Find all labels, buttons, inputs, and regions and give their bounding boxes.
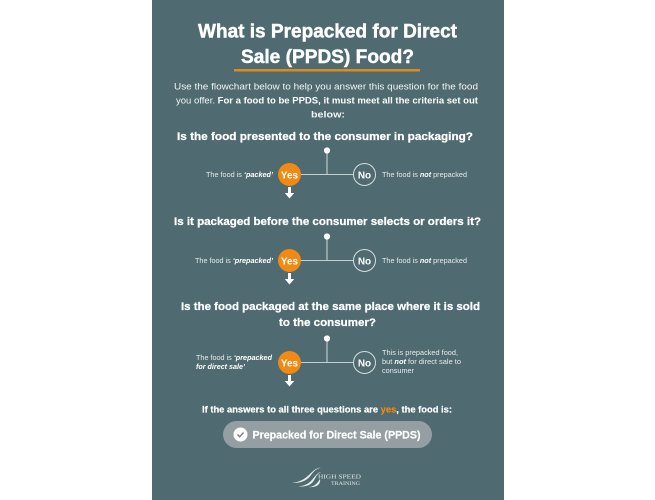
no label <box>382 348 461 375</box>
title: Sale (PPDS) Food? <box>241 47 414 68</box>
flow 1 <box>206 147 467 198</box>
yes label: for direct sale’ <box>196 362 246 371</box>
question 1: Is the food presented to the consumer in packaging? <box>177 131 473 143</box>
logo: High Speed Training: HIGH SPEED <box>318 474 361 480</box>
no label: The food is not prepacked <box>382 256 467 265</box>
question 3 <box>181 301 480 329</box>
yes node <box>278 249 301 272</box>
flow 3 <box>196 335 461 386</box>
yes label: The food is ‘packed’ <box>206 170 274 179</box>
logo: High Speed Training: TRAINING <box>331 482 360 487</box>
result pill: Prepacked for Direct Sale (PPDS) <box>252 430 421 442</box>
no label: but not for direct sale to <box>382 357 461 366</box>
down arrow <box>285 187 294 198</box>
yes node: Yes <box>281 358 299 369</box>
question 3: Is the food packaged at the same place where it is sold <box>181 301 480 313</box>
no node: No <box>358 256 371 267</box>
down arrow <box>285 375 294 386</box>
yes node <box>278 163 301 186</box>
icon: logo swoosh <box>292 468 321 487</box>
no node: No <box>358 170 371 181</box>
icon: check badge <box>234 428 248 442</box>
no node <box>354 250 376 272</box>
intro text: below: <box>311 110 345 120</box>
yes node: Yes <box>281 170 299 181</box>
question 2: Is it packaged before the consumer selects or orders it? <box>174 216 481 228</box>
panel: background <box>152 0 504 500</box>
intro text: you offer. For a food to be PPDS, it must meet all the criteria set out <box>176 96 478 106</box>
yes label: The food is ‘prepacked’ <box>195 256 274 265</box>
question 3: to the consumer? <box>279 317 376 329</box>
start dot <box>324 335 330 342</box>
connector lines <box>300 339 353 362</box>
flow 2 <box>195 233 467 284</box>
no node: No <box>358 358 371 369</box>
yes node <box>278 351 301 374</box>
yes label <box>196 353 273 371</box>
no node <box>354 164 376 186</box>
start dot <box>324 147 330 154</box>
no label: consumer <box>382 366 415 375</box>
title underline <box>234 69 420 72</box>
no node <box>354 352 376 374</box>
start dot <box>324 233 330 240</box>
title <box>198 22 458 68</box>
logo: High Speed Training <box>292 468 361 487</box>
intro text: Use the flowchart below to help you answer this question for the food <box>174 82 478 92</box>
connector lines <box>300 237 353 260</box>
no label: The food is not prepacked <box>382 170 467 179</box>
conclusion text: If the answers to all three questions are yes, the food is: <box>202 404 452 416</box>
no label: This is prepacked food, <box>382 348 458 357</box>
down arrow <box>285 273 294 284</box>
intro text <box>174 82 478 120</box>
yes node: Yes <box>281 256 299 267</box>
yes label: The food is ‘prepacked <box>196 353 273 362</box>
result pill <box>223 421 432 448</box>
connector lines <box>300 151 353 174</box>
title: What is Prepacked for Direct <box>198 22 458 42</box>
